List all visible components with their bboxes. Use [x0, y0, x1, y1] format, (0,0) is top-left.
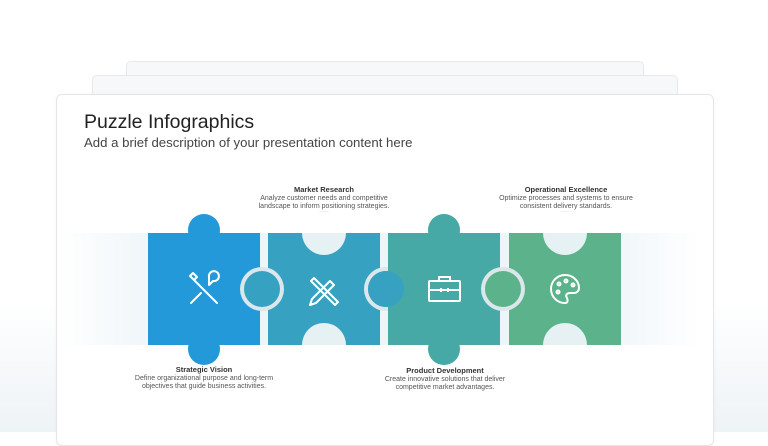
- title: Puzzle Infographics: [84, 111, 254, 133]
- main card: [56, 94, 714, 446]
- piece 1: [148, 214, 260, 365]
- icon: pencil ruler: [310, 278, 338, 305]
- back card 2: [126, 61, 644, 123]
- caption: Market Research: Analyze customer needs and competitive landscape to inform positioning strategies.: [259, 194, 389, 210]
- piece 4: [481, 211, 621, 367]
- icon: briefcase: [429, 277, 460, 301]
- caption: Operational Excellence: [499, 185, 633, 210]
- caption: Strategic Vision: [135, 365, 273, 390]
- back card 1: [92, 75, 678, 137]
- caption: Market Research: [259, 185, 389, 210]
- piece 3: [368, 214, 500, 365]
- caption: Strategic Vision: Define organizational purpose and long-term objectives that guide business activities.: [135, 374, 273, 390]
- icon: tools: [190, 271, 219, 303]
- caption: Strategic Vision: Strategic Vision: [176, 365, 232, 374]
- caption: Market Research: Market Research: [294, 185, 354, 194]
- caption: Product Development: Product Development: [406, 366, 484, 375]
- subtitle: Add a brief description of your presentation content here: [84, 135, 412, 150]
- caption: Product Development: Create innovative solutions that deliver competitive market advantages.: [385, 376, 505, 391]
- piece 2: [240, 211, 408, 367]
- caption: Product Development: [385, 366, 505, 391]
- caption: Operational Excellence: Operational Excellence: [525, 185, 607, 194]
- icon: palette: [551, 275, 579, 303]
- caption: Operational Excellence: Optimize processes and systems to ensure consistent delivery standards.: [499, 194, 633, 210]
